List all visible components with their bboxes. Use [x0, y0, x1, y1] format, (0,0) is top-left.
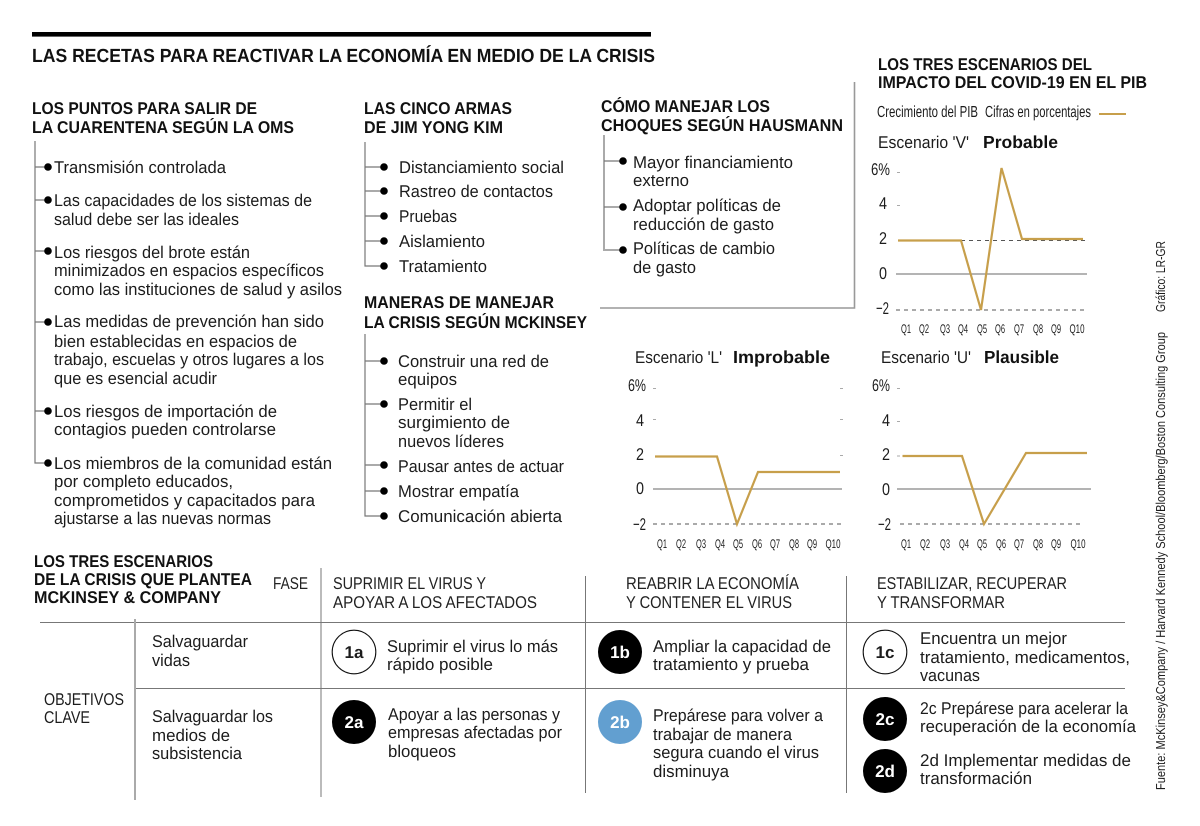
- row label: medios: medios de: [152, 726, 230, 745]
- quarter labels L: Q9: [807, 537, 817, 551]
- cell 2b: Prepárese para volver a: [653, 706, 824, 725]
- line V: [898, 168, 1083, 310]
- text block: OMS points: [54, 158, 342, 528]
- text block: OMS points: salud debe ser las ideales: [54, 210, 239, 229]
- cell 2d: 2d: [875, 762, 895, 781]
- heading: Hausmann: CÓMO MANEJAR LOS: [601, 96, 770, 116]
- cell 2b: [598, 700, 824, 781]
- row group label: OBJETIVOS: [44, 690, 124, 709]
- heading: McKinsey crisis: LA CRISIS SEGÚN MCKINSEY: [364, 312, 588, 332]
- header: fase 3: ESTABILIZAR, RECUPERAR: [877, 574, 1067, 593]
- text block: Hausmann: externo: [633, 171, 689, 190]
- y axis labels L: 2: [636, 445, 644, 464]
- quarter labels U: Q9: [1051, 537, 1061, 551]
- cell 1c: 1c: [876, 643, 894, 662]
- cell 2c: [863, 697, 1137, 741]
- text block: OMS points: Los miembros de la comunidad están: [54, 454, 332, 473]
- source credit: Fuente: McKinsey&Company / Harvard Kennedy School/Bloomberg/Boston Consulting Group: [1153, 332, 1168, 790]
- heading: cinco armas: [364, 99, 512, 137]
- text block: Hausmann: [633, 153, 793, 277]
- chart title V: Escenario 'V': [878, 133, 969, 152]
- quarter labels U: Q8: [1033, 537, 1043, 551]
- legend: Cifras en porcentajes: [985, 104, 1091, 121]
- cell 1a: [332, 630, 558, 674]
- quarter labels L: Q1: [657, 537, 667, 551]
- panel: escenarios PIB heading: [878, 55, 1147, 92]
- chart title U: Plausible: [984, 347, 1059, 367]
- header: fase 2: Y CONTENER EL VIRUS: [626, 593, 792, 612]
- gridlines U: [897, 388, 1091, 524]
- y axis labels L: −2: [633, 515, 646, 534]
- y axis labels L: 4: [636, 411, 644, 430]
- text block: OMS points: como las instituciones de salud y asilos: [54, 280, 342, 299]
- quarter labels L: Q7: [770, 537, 780, 551]
- line U: [902, 453, 1087, 524]
- row label: medios: Salvaguardar los: [152, 707, 273, 726]
- y axis labels U: 4: [882, 411, 890, 430]
- cell 2a: Apoyar a las personas y: [388, 705, 560, 724]
- row label: vidas: Salvaguardar: [152, 632, 248, 651]
- panel: escenarios PIB heading: LOS TRES ESCENARIOS DEL: [878, 55, 1092, 74]
- heading: McKinsey crisis: [364, 293, 588, 332]
- row label: medios: [152, 707, 273, 763]
- cell 2a: 2a: [345, 713, 364, 732]
- heading: Hausmann: [601, 96, 843, 135]
- header: fase 1: [333, 574, 537, 612]
- text block: McKinsey crisis: Comunicación abierta: [398, 507, 563, 526]
- cell 1c: [863, 629, 1130, 685]
- header: fase 1: SUPRIMIR EL VIRUS Y: [333, 574, 486, 593]
- title: LAS RECETAS PARA REACTIVAR LA ECONOMÍA EN MEDIO DE LA CRISIS: [32, 45, 655, 67]
- text block: cinco armas: Rastreo de contactos: [399, 182, 553, 201]
- gridlines V: [896, 172, 1087, 310]
- header: fase 3: Y TRANSFORMAR: [877, 593, 1005, 612]
- y axis labels U: 0: [882, 480, 890, 499]
- header: fase 2: [626, 574, 800, 612]
- text block: McKinsey crisis: Mostrar empatía: [398, 482, 520, 501]
- y axis labels V: [871, 160, 890, 318]
- text block: OMS points: contagios pueden controlarse: [54, 420, 276, 439]
- text block: McKinsey crisis: nuevos líderes: [398, 432, 504, 451]
- y axis labels U: 2: [882, 445, 890, 464]
- header: fase 2: REABRIR LA ECONOMÍA: [626, 574, 800, 593]
- quarter labels L: Q2: [676, 537, 686, 551]
- cell 1b: 1b: [610, 643, 630, 662]
- quarter labels L: Q8: [789, 537, 799, 551]
- text block: Hausmann: Mayor financiamiento: [633, 153, 793, 172]
- cell 2b: 2b: [610, 713, 630, 732]
- cell 2d: 2d Implementar medidas de: [920, 751, 1131, 770]
- text block: cinco armas: Pruebas: [399, 207, 457, 226]
- text block: OMS points: por completo educados,: [54, 472, 233, 491]
- text block: Hausmann: Adoptar políticas de: [633, 196, 781, 215]
- chart: escenario U: [872, 347, 1091, 551]
- top bar: [32, 32, 651, 37]
- y axis labels U: [872, 376, 891, 534]
- text block: Hausmann: de gasto: [633, 258, 696, 277]
- text block: OMS points: minimizados en espacios específicos: [54, 261, 324, 280]
- text block: OMS points: Las medidas de prevención han sido: [54, 312, 324, 331]
- heading: McKinsey crisis: MANERAS DE MANEJAR: [364, 293, 554, 312]
- cell 2c: 2c: [876, 710, 894, 729]
- legend: Crecimiento del PIB: [877, 104, 978, 121]
- text block: OMS points: trabajo, escuelas y otros lugares a los: [54, 350, 324, 369]
- cell 1c: vacunas: [920, 666, 980, 685]
- panel: cinco armas: [364, 99, 564, 276]
- quarter labels U: Q6: [996, 537, 1006, 551]
- row label: medios: subsistencia: [152, 744, 243, 763]
- cell 1c: Encuentra un mejor: [920, 629, 1067, 648]
- cell 2a: bloqueos: [388, 742, 456, 761]
- quarter labels U: Q1: [901, 537, 911, 551]
- quarter labels V: Q7: [1014, 322, 1024, 336]
- cell 2c: recuperación de la economía: [920, 717, 1137, 736]
- cell 2a: [332, 700, 562, 761]
- panel: puntos OMS: [32, 99, 342, 528]
- bullet tree: McKinsey crisis: [365, 334, 388, 520]
- source credit: Gráfico: LR-GR: [1153, 241, 1168, 312]
- heading: cinco armas: LAS CINCO ARMAS: [364, 99, 512, 118]
- cell 2d: transformación: [920, 769, 1032, 788]
- heading: Hausmann: CHOQUES SEGÚN HAUSMANN: [601, 115, 843, 135]
- quarter labels L: Q3: [696, 537, 706, 551]
- y axis labels L: [628, 376, 646, 534]
- bullet tree: cinco armas: [365, 142, 388, 270]
- row group label: CLAVE: [44, 708, 90, 727]
- text block: cinco armas: Aislamiento: [399, 232, 485, 251]
- text block: McKinsey crisis: equipos: [398, 370, 457, 389]
- chart title U: [881, 347, 1059, 367]
- cell 2a: empresas afectadas por: [388, 723, 562, 742]
- quarter labels U: [901, 537, 1086, 551]
- y axis labels V: 0: [879, 264, 887, 283]
- text block: McKinsey crisis: Pausar antes de actuar: [398, 457, 564, 476]
- cell 2b: segura cuando el virus: [653, 743, 819, 762]
- panel: tabla McKinsey: [34, 552, 1137, 800]
- quarter labels L: [657, 537, 841, 551]
- cell 2d: [863, 749, 1131, 793]
- cell 2b: disminuya: [653, 762, 730, 781]
- text block: OMS points: ajustarse a las nuevas normas: [54, 509, 271, 528]
- panel border: [600, 82, 854, 308]
- line L: [655, 456, 840, 524]
- text block: Hausmann: reducción de gasto: [633, 215, 774, 234]
- quarter labels L: Q5: [733, 537, 743, 551]
- cell 1a: rápido posible: [387, 655, 493, 674]
- panel: McKinsey crisis: [364, 293, 588, 526]
- chart: escenario V: [871, 132, 1087, 336]
- quarter labels V: Q1: [901, 322, 911, 336]
- chart title U: Escenario 'U': [881, 348, 971, 367]
- cell 1b: tratamiento y prueba: [653, 655, 810, 674]
- quarter labels V: Q5: [977, 322, 987, 336]
- cell 1a: 1a: [345, 643, 364, 662]
- text block: McKinsey crisis: Permitir el: [398, 395, 472, 414]
- chart title V: [878, 132, 1058, 152]
- quarter labels U: Q3: [940, 537, 950, 551]
- cell 1a: Suprimir el virus lo más: [387, 637, 558, 656]
- y axis labels L: 6%: [628, 376, 646, 395]
- quarter labels V: Q2: [919, 322, 929, 336]
- y axis labels U: 6%: [872, 376, 890, 395]
- text block: OMS points: comprometidos y capacitados para: [54, 491, 316, 510]
- chart: escenario L: [628, 347, 843, 551]
- quarter labels V: Q8: [1033, 322, 1043, 336]
- quarter labels U: Q5: [977, 537, 987, 551]
- quarter labels U: Q10: [1070, 537, 1086, 551]
- cell 2c: 2c Prepárese para acelerar la: [920, 699, 1128, 718]
- y axis labels V: 2: [879, 229, 887, 248]
- text block: OMS points: que es esencial acudir: [54, 369, 217, 388]
- bullet tree: OMS: [35, 141, 52, 467]
- quarter labels V: [901, 322, 1085, 336]
- header: fase 1: APOYAR A LOS AFECTADOS: [333, 593, 537, 612]
- cell 1b: Ampliar la capacidad de: [653, 637, 831, 656]
- quarter labels V: Q6: [995, 322, 1005, 336]
- y axis labels U: −2: [878, 515, 891, 534]
- quarter labels U: Q4: [959, 537, 969, 551]
- quarter labels V: Q4: [958, 322, 968, 336]
- text block: Hausmann: Políticas de cambio: [633, 239, 775, 258]
- row label: vidas: [152, 632, 248, 670]
- quarter labels L: Q10: [826, 537, 841, 551]
- heading: puntos OMS: [32, 99, 294, 137]
- quarter labels U: Q7: [1014, 537, 1024, 551]
- y axis labels V: −2: [876, 299, 889, 318]
- cell 1c: tratamiento, medicamentos,: [920, 648, 1130, 667]
- chart title L: Improbable: [733, 347, 830, 367]
- quarter labels V: Q3: [940, 322, 950, 336]
- text block: OMS points: bien establecidas en espacios de: [54, 332, 297, 351]
- text block: cinco armas: [399, 158, 564, 276]
- cell 1b: [598, 630, 831, 674]
- quarter labels V: Q10: [1070, 322, 1085, 336]
- heading: tabla: [34, 552, 252, 607]
- heading: puntos OMS: LA CUARENTENA SEGÚN LA OMS: [32, 117, 294, 137]
- panel: choques Hausmann: [600, 82, 854, 308]
- quarter labels L: Q6: [752, 537, 762, 551]
- heading: cinco armas: DE JIM YONG KIM: [364, 118, 503, 137]
- text block: McKinsey crisis: [398, 352, 564, 526]
- text block: OMS points: Los riesgos de importación de: [54, 402, 277, 421]
- row group label: [44, 690, 124, 727]
- text block: OMS points: Las capacidades de los sistemas de: [54, 191, 312, 210]
- y axis labels V: 6%: [871, 160, 890, 179]
- panel: escenarios PIB heading: IMPACTO DEL COVID-19 EN EL PIB: [878, 73, 1147, 92]
- text block: McKinsey crisis: Construir una red de: [398, 352, 549, 371]
- legend: [877, 104, 1126, 121]
- y axis labels L: 0: [636, 479, 644, 498]
- quarter labels L: Q4: [715, 537, 725, 551]
- text block: OMS points: Transmisión controlada: [54, 158, 227, 177]
- y axis labels V: 4: [879, 194, 887, 213]
- heading: puntos OMS: LOS PUNTOS PARA SALIR DE: [32, 99, 257, 118]
- heading: tabla: DE LA CRISIS QUE PLANTEA: [34, 570, 252, 589]
- cell 2b: trabajar de manera: [653, 725, 793, 744]
- heading: tabla: LOS TRES ESCENARIOS: [34, 552, 213, 571]
- quarter labels U: Q2: [920, 537, 930, 551]
- text block: McKinsey crisis: surgimiento de: [398, 413, 510, 432]
- quarter labels V: Q9: [1051, 322, 1061, 336]
- text block: cinco armas: Tratamiento: [399, 257, 487, 276]
- gridlines L: [653, 388, 843, 524]
- table rules: [40, 568, 1125, 800]
- heading: tabla: MCKINSEY & COMPANY: [34, 588, 222, 607]
- text block: cinco armas: Distanciamiento social: [399, 158, 564, 177]
- chart title V: Probable: [983, 132, 1058, 152]
- row label: vidas: vidas: [152, 651, 190, 670]
- chart title L: Escenario 'L': [635, 348, 722, 367]
- bullet tree: Hausmann: [604, 135, 627, 254]
- header: fase: FASE: [273, 574, 308, 593]
- text block: OMS points: Los riesgos del brote están: [54, 243, 250, 262]
- header: fase 3: [877, 574, 1067, 612]
- chart title L: [635, 347, 830, 367]
